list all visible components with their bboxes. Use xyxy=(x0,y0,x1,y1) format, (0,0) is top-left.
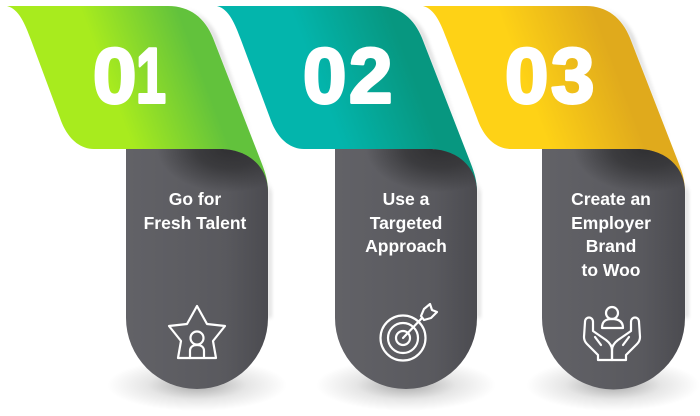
panel: step 2 xyxy=(217,6,496,411)
number 02: 0 xyxy=(303,32,346,120)
dark pill 1 xyxy=(126,149,268,389)
label 2: Use a xyxy=(383,189,430,209)
number 03: 0 xyxy=(505,32,548,120)
ribbon 3 xyxy=(423,6,685,192)
number 03 xyxy=(505,32,594,120)
edge shadow 2 xyxy=(378,6,480,318)
label 3: Brand xyxy=(586,236,636,256)
pill shadow xyxy=(107,359,287,411)
ribbon 1 xyxy=(7,6,268,192)
label 2: Targeted xyxy=(370,213,442,233)
label 3: Create an xyxy=(571,189,651,209)
number 02 xyxy=(303,32,392,120)
label 3: Employer xyxy=(571,213,651,233)
pill shadow xyxy=(526,359,700,411)
number 02: 2 xyxy=(349,32,392,120)
dark pill 2 xyxy=(335,149,477,389)
pill top shade 3 xyxy=(542,149,685,389)
pill shadow xyxy=(316,359,496,411)
panel: step 1 xyxy=(7,6,287,411)
number 03: 3 xyxy=(551,32,594,120)
number 01 xyxy=(93,32,166,120)
icon: target with arrow xyxy=(380,304,437,360)
number 01: 0 xyxy=(93,32,136,120)
pill top shade 1 xyxy=(126,149,268,389)
number 01: 1 xyxy=(136,32,166,120)
label 2: Approach xyxy=(365,236,447,256)
pill top shade 2 xyxy=(335,149,477,389)
label 1: Fresh Talent xyxy=(144,213,247,233)
label 1: Go for xyxy=(169,189,221,209)
icon: hands holding person xyxy=(584,307,640,360)
edge shadow 3 xyxy=(586,6,688,318)
dark pill 3 xyxy=(542,149,685,389)
edge shadow 1 xyxy=(168,6,271,318)
panel: step 3 xyxy=(423,6,700,411)
icon: star with person xyxy=(169,306,225,358)
label 3: to Woo xyxy=(582,260,640,280)
ribbon 2 xyxy=(217,6,477,192)
